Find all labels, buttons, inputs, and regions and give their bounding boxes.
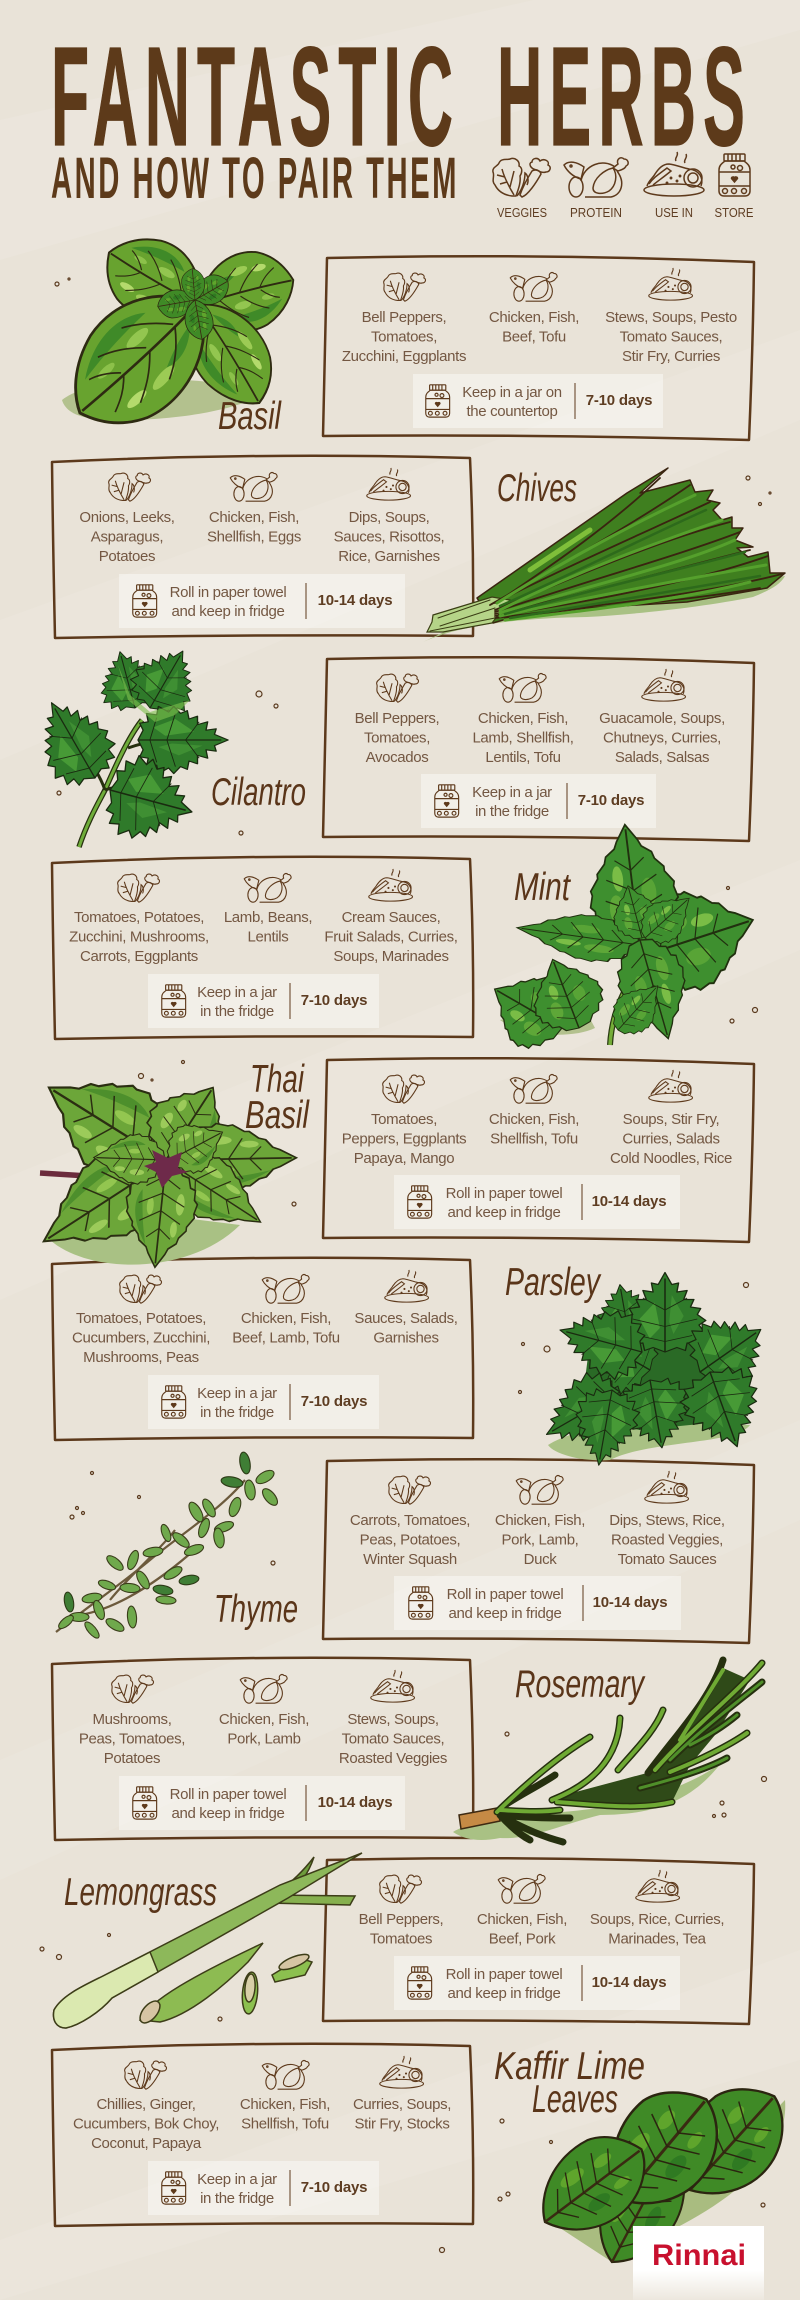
use in column: Tomato Sauces	[618, 1551, 716, 1568]
veggies column: Carrots, Tomatoes,	[350, 1512, 470, 1529]
herb name: thai basil: Thai	[250, 1058, 305, 1101]
use in column: Roasted Veggies	[339, 1750, 447, 1767]
veggies column: Avocados	[366, 749, 428, 766]
protein column: Lentils	[248, 928, 288, 946]
herb name: lemongrass: Lemongrass	[64, 1871, 217, 1914]
protein column: Lamb, Beans,	[224, 909, 312, 926]
legend item: protein	[564, 158, 628, 220]
veggies column: Onions, Leeks,	[79, 509, 175, 526]
use in column: Cold Noodles, Rice	[610, 1150, 732, 1167]
protein column	[489, 273, 579, 346]
protein column: Shellfish, Tofu	[241, 2116, 329, 2132]
veggies column: Carrots, Eggplants	[80, 948, 198, 965]
veggies column: Potatoes	[99, 548, 155, 565]
storage note: the countertop	[466, 403, 558, 420]
storage note	[394, 1576, 681, 1630]
use in column	[599, 669, 725, 766]
herb name: mint: Mint	[514, 866, 572, 909]
veggies column: Zucchini, Mushrooms,	[69, 928, 209, 946]
storage note	[148, 2161, 379, 2215]
use in column: Cream Sauces,	[342, 909, 440, 926]
herb name: rosemary: Rosemary	[515, 1663, 646, 1706]
use in column	[339, 1670, 447, 1767]
veggies column: Coconut, Papaya	[91, 2135, 202, 2152]
storage note	[394, 1175, 680, 1229]
veggies column: Tomatoes	[370, 1930, 432, 1948]
herb name: kaffir lime leaves	[494, 2045, 645, 2121]
storage note: Roll in paper towel	[170, 1786, 286, 1803]
veggies column	[342, 1075, 466, 1167]
use in column: Stews, Soups,	[347, 1711, 439, 1728]
storage note: and keep in fridge	[448, 1985, 560, 2002]
storage note: 7-10 days	[301, 1393, 367, 1410]
illustration: thyme	[56, 1451, 280, 1640]
logo: rinnai	[633, 2226, 764, 2300]
use in column	[609, 1471, 725, 1568]
veggies column: Winter Squash	[363, 1551, 457, 1568]
veggies column: Mushrooms, Peas	[83, 1349, 199, 1366]
protein column: Chicken, Fish,	[489, 309, 579, 326]
veggies column	[79, 1675, 185, 1767]
legend item: veggies	[493, 158, 550, 220]
panel: cilantro	[323, 657, 754, 841]
panel: thai basil	[323, 1058, 754, 1242]
use in column	[590, 1870, 724, 1948]
protein column	[240, 2061, 330, 2132]
protein column	[489, 1075, 579, 1148]
veggies column: Mushrooms,	[92, 1711, 172, 1728]
use in column: Sauces, Risottos,	[334, 528, 444, 546]
protein column: Shellfish, Eggs	[207, 528, 301, 546]
use in column: Dips, Stews, Rice,	[609, 1512, 725, 1529]
use in column: Tomato Sauces,	[620, 328, 722, 346]
use in column	[324, 869, 458, 965]
storage note: and keep in fridge	[448, 1204, 560, 1221]
protein column: Duck	[524, 1551, 557, 1568]
veggies column	[73, 2061, 219, 2152]
storage note: Roll in paper towel	[446, 1966, 562, 1983]
protein column	[232, 1275, 340, 1346]
storage note: 10-14 days	[592, 1193, 666, 1210]
protein column	[224, 874, 312, 946]
legend item: veggies: VEGGIES	[497, 206, 547, 220]
use in column: Tomato Sauces,	[342, 1730, 444, 1748]
protein column: Chicken, Fish,	[489, 1111, 579, 1128]
veggies column: Peppers, Eggplants	[342, 1130, 466, 1148]
storage note: Keep in a jar	[197, 2171, 277, 2188]
protein column	[477, 1875, 567, 1948]
protein column: Chicken, Fish,	[478, 710, 568, 727]
logo: rinnai: Rinnai	[652, 2239, 746, 2272]
storage note: 10-14 days	[318, 592, 392, 609]
veggies column: Tomatoes, Potatoes,	[76, 1310, 206, 1327]
herb name: chives: Chives	[497, 467, 577, 510]
illustration: mint	[476, 819, 768, 1061]
illustration: thai basil	[21, 1047, 297, 1277]
use in column: Guacamole, Soups,	[599, 710, 725, 727]
use in column: Salads, Salsas	[615, 749, 709, 766]
veggies column: Tomatoes,	[371, 328, 437, 346]
panel: thyme	[323, 1459, 754, 1643]
protein column: Chicken, Fish,	[241, 1310, 331, 1327]
protein column: Chicken, Fish,	[495, 1512, 585, 1529]
storage note: Keep in a jar	[197, 1385, 277, 1402]
herb name: cilantro: Cilantro	[211, 771, 306, 814]
panel: mint	[52, 857, 473, 1039]
storage note: and keep in fridge	[172, 603, 284, 620]
storage note: 7-10 days	[301, 2179, 367, 2196]
herb name: basil: Basil	[218, 395, 282, 438]
protein column	[207, 473, 301, 546]
storage note	[148, 1375, 379, 1429]
use in column: Garnishes	[373, 1330, 439, 1346]
veggies column: Cucumbers, Bok Choy,	[73, 2116, 219, 2132]
panel: chives	[52, 456, 473, 638]
veggies column: Bell Peppers,	[359, 1911, 443, 1928]
illustration: cilantro	[22, 635, 228, 851]
storage note: 7-10 days	[578, 792, 644, 809]
legend item: use in	[644, 152, 704, 220]
veggies column: Bell Peppers,	[362, 309, 446, 326]
veggies column: Potatoes	[104, 1750, 160, 1767]
veggies column: Tomatoes, Potatoes,	[74, 909, 204, 926]
protein column: Beef, Lamb, Tofu	[232, 1330, 340, 1346]
protein column: Beef, Pork	[489, 1930, 556, 1948]
storage note: Keep in a jar on	[462, 384, 562, 401]
herb name: kaffir lime leaves: Kaffir Lime	[494, 2045, 645, 2088]
use in column	[353, 2056, 451, 2132]
storage note: Keep in a jar	[197, 984, 277, 1001]
herb name: thyme: Thyme	[214, 1588, 298, 1631]
use in column: Roasted Veggies,	[611, 1532, 723, 1548]
storage note: Roll in paper towel	[447, 1586, 563, 1603]
protein column: Lentils, Tofu	[485, 749, 561, 766]
protein column: Chicken, Fish,	[219, 1711, 309, 1728]
veggies column: Papaya, Mango	[354, 1150, 454, 1167]
legend item: store: STORE	[714, 206, 754, 220]
storage note: Keep in a jar	[472, 784, 552, 801]
storage note	[119, 574, 405, 628]
legend item: store	[714, 154, 754, 220]
storage note: 7-10 days	[301, 992, 367, 1009]
use in column	[610, 1070, 732, 1167]
panel: lemongrass	[323, 1858, 754, 2024]
veggies column	[342, 273, 466, 365]
herb name: thai basil: Basil	[245, 1094, 310, 1137]
use in column: Chutneys, Curries,	[603, 730, 721, 746]
use in column: Stews, Soups, Pesto	[605, 309, 737, 326]
veggies column	[355, 674, 439, 766]
use in column	[605, 268, 737, 365]
use in column: Fruit Salads, Curries,	[324, 928, 458, 946]
storage note: Roll in paper towel	[170, 584, 286, 601]
veggies column: Peas, Tomatoes,	[79, 1730, 185, 1748]
veggies column: Peas, Potatoes,	[360, 1532, 460, 1548]
veggies column	[79, 473, 175, 565]
protein column: Pork, Lamb	[227, 1730, 301, 1748]
use in column: Stir Fry, Stocks	[355, 2116, 449, 2132]
illustration: kaffir lime leaves	[520, 2066, 800, 2279]
panel: kaffir lime leaves	[52, 2044, 473, 2226]
storage note	[413, 374, 663, 428]
protein column: Chicken, Fish,	[477, 1911, 567, 1928]
protein column: Lamb, Shellfish,	[472, 730, 574, 746]
use in column	[334, 468, 444, 565]
use in column: Soups, Marinades	[333, 948, 449, 965]
use in column: Rice, Garnishes	[338, 548, 440, 565]
storage note	[119, 1776, 405, 1830]
use in column: Dips, Soups,	[349, 509, 429, 526]
legend	[493, 152, 754, 220]
storage note: in the fridge	[200, 2190, 274, 2207]
herb name: thai basil	[245, 1058, 310, 1137]
veggies column: Tomatoes,	[371, 1111, 437, 1128]
illustration: parsley	[530, 1272, 783, 1471]
legend item: use in: USE IN	[655, 206, 693, 220]
panel: basil	[323, 256, 754, 440]
protein column: Shellfish, Tofu	[490, 1130, 578, 1148]
protein column	[472, 674, 574, 766]
use in column: Curries, Soups,	[353, 2096, 451, 2113]
use in column: Soups, Stir Fry,	[623, 1111, 719, 1128]
veggies column: Bell Peppers,	[355, 710, 439, 727]
storage note: and keep in fridge	[449, 1605, 561, 1622]
veggies column	[72, 1275, 210, 1366]
illustration: lemongrass	[54, 1853, 362, 2028]
use in column: Stir Fry, Curries	[622, 348, 720, 365]
use in column: Sauces, Salads,	[354, 1310, 458, 1327]
protein column: Pork, Lamb,	[501, 1532, 579, 1548]
panel: parsley	[52, 1258, 473, 1440]
storage note: in the fridge	[200, 1003, 274, 1020]
protein column: Chicken, Fish,	[209, 509, 299, 526]
veggies column: Asparagus,	[91, 528, 163, 546]
veggies column: Tomatoes,	[364, 730, 430, 746]
veggies column	[350, 1476, 470, 1568]
protein column: Chicken, Fish,	[240, 2096, 330, 2113]
illustration: chives	[423, 468, 785, 642]
storage note	[394, 1956, 680, 2010]
veggies column: Chillies, Ginger,	[96, 2096, 196, 2113]
storage note	[148, 974, 379, 1028]
veggies column: Zucchini, Eggplants	[342, 348, 466, 365]
storage note: 10-14 days	[593, 1594, 667, 1611]
storage note: 10-14 days	[318, 1794, 392, 1811]
panel: rosemary	[52, 1658, 473, 1840]
storage note	[421, 774, 656, 828]
veggies column: Cucumbers, Zucchini,	[72, 1330, 210, 1346]
veggies column	[69, 874, 209, 965]
illustration: rosemary	[453, 1660, 762, 1842]
herb name: kaffir lime leaves: Leaves	[532, 2078, 618, 2121]
herb name: parsley: Parsley	[505, 1261, 602, 1304]
storage note: 7-10 days	[586, 392, 652, 409]
storage note: 10-14 days	[592, 1974, 666, 1991]
protein column	[495, 1476, 585, 1568]
use in column: Soups, Rice, Curries,	[590, 1911, 724, 1928]
protein column	[219, 1675, 309, 1748]
legend item: protein: PROTEIN	[570, 206, 622, 220]
protein column: Beef, Tofu	[502, 328, 566, 346]
storage note: in the fridge	[200, 1404, 274, 1421]
speckles	[40, 278, 771, 2252]
use in column	[354, 1270, 458, 1346]
storage note: and keep in fridge	[172, 1805, 284, 1822]
use in column: Marinades, Tea	[608, 1930, 707, 1948]
storage note: Roll in paper towel	[446, 1185, 562, 1202]
illustration: basil	[45, 220, 303, 452]
use in column: Curries, Salads	[622, 1130, 720, 1148]
storage note: in the fridge	[475, 803, 549, 820]
veggies column	[359, 1875, 443, 1948]
